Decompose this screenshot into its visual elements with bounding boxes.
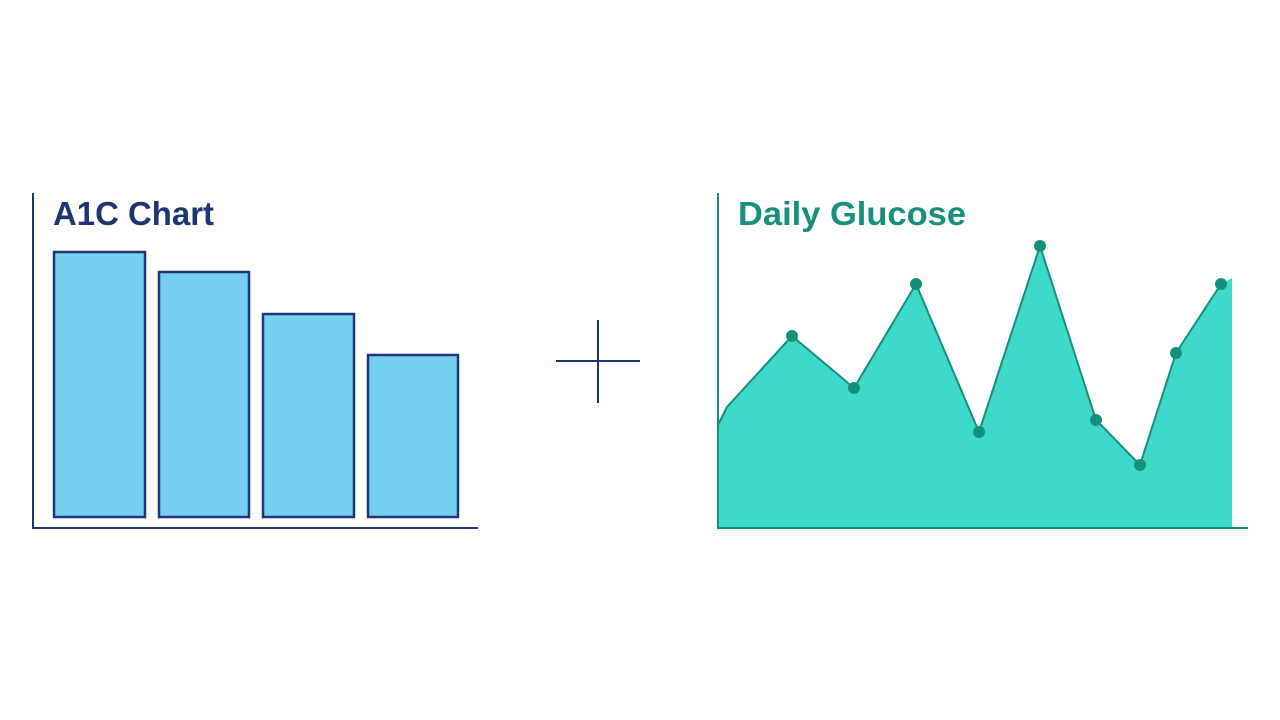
glucose points	[786, 240, 1227, 471]
A1C title: A1C Chart	[53, 195, 214, 232]
panel: A1C chart	[33, 193, 478, 528]
A1C bars	[54, 252, 458, 517]
glucose area	[718, 246, 1232, 528]
A1C axes	[33, 193, 478, 528]
glucose line	[718, 246, 1221, 465]
glucose axes	[718, 193, 1248, 528]
icon: plus sign	[556, 320, 640, 403]
glucose title: Daily Glucose	[738, 195, 966, 232]
panel: Daily Glucose chart	[718, 193, 1248, 528]
